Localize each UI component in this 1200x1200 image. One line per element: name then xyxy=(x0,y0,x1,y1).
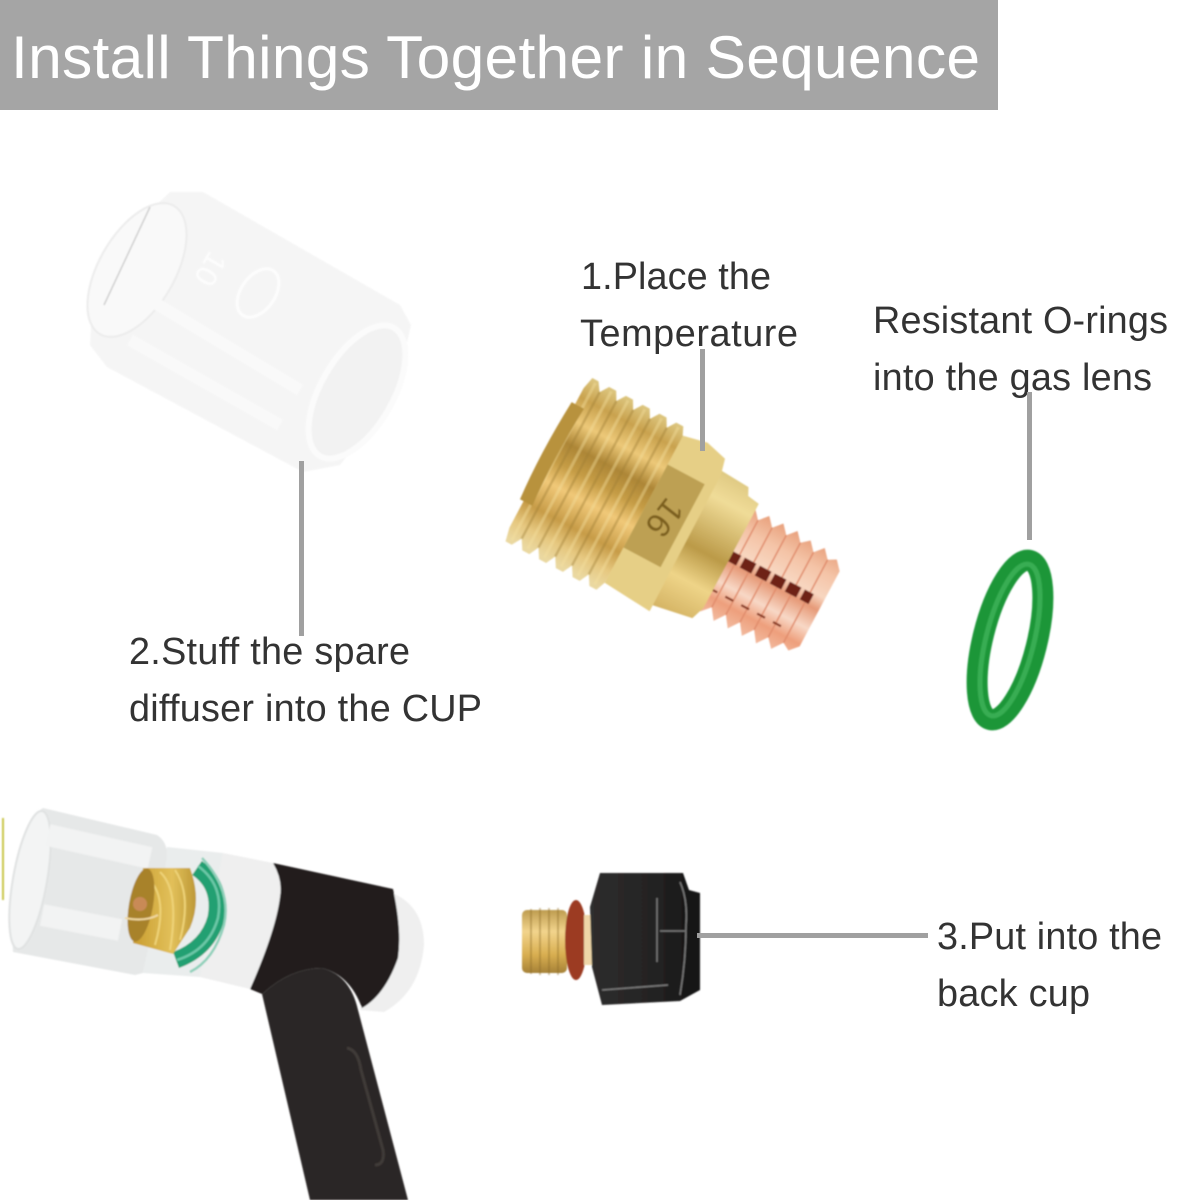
copper thread xyxy=(691,504,847,662)
leader line: o-ring xyxy=(1027,392,1032,540)
label: step 3 xyxy=(937,916,1162,1015)
label: step 1: Temperature xyxy=(580,313,798,355)
rear cap xyxy=(360,892,424,1012)
label: o-ring xyxy=(873,300,1168,399)
glass cup xyxy=(12,808,167,975)
torch head xyxy=(250,863,399,1008)
brass fitting xyxy=(133,868,196,954)
icon: brass gas lens insert xyxy=(498,374,865,686)
label: step 1 xyxy=(580,256,798,355)
title banner xyxy=(0,0,998,110)
label: step 2: 2.Stuff the spare xyxy=(129,631,410,673)
title banner: Install Things Together in Sequence xyxy=(11,23,980,91)
wire coil xyxy=(150,870,185,950)
label: o-ring: into the gas lens xyxy=(873,357,1152,399)
label: step 2: diffuser into the CUP xyxy=(129,688,482,730)
end face xyxy=(518,401,584,506)
threaded stem xyxy=(522,910,567,973)
label: step 1: 1.Place the xyxy=(581,256,771,298)
dark streak xyxy=(727,555,811,599)
brass collar xyxy=(600,430,732,611)
label: o-ring: Resistant O-rings xyxy=(873,300,1168,342)
black cap xyxy=(590,873,700,1005)
icon: assembled TIG torch xyxy=(1,808,424,1200)
red o-ring xyxy=(565,900,587,980)
icon: glass cup: 10 xyxy=(187,246,232,291)
icon: green o-ring xyxy=(964,554,1056,726)
icon: back cup fitting xyxy=(522,873,700,1005)
icon: glass cup xyxy=(67,187,425,474)
label: step 3: back cup xyxy=(937,973,1090,1015)
brass thread xyxy=(503,377,687,592)
yellow edge mark xyxy=(2,818,4,900)
white collar xyxy=(200,853,281,989)
brass second step xyxy=(648,469,764,628)
handle neck xyxy=(262,968,408,1200)
handle grip groove xyxy=(347,1048,383,1165)
leader line: cup xyxy=(299,461,304,636)
label: step 2 xyxy=(129,631,482,730)
leader line: back cup xyxy=(697,933,928,938)
label: step 3: 3.Put into the xyxy=(937,916,1162,958)
leader line: insert xyxy=(700,349,705,451)
icon: brass gas lens insert: 16 xyxy=(638,491,691,544)
green rings xyxy=(176,858,226,972)
base xyxy=(143,847,223,977)
